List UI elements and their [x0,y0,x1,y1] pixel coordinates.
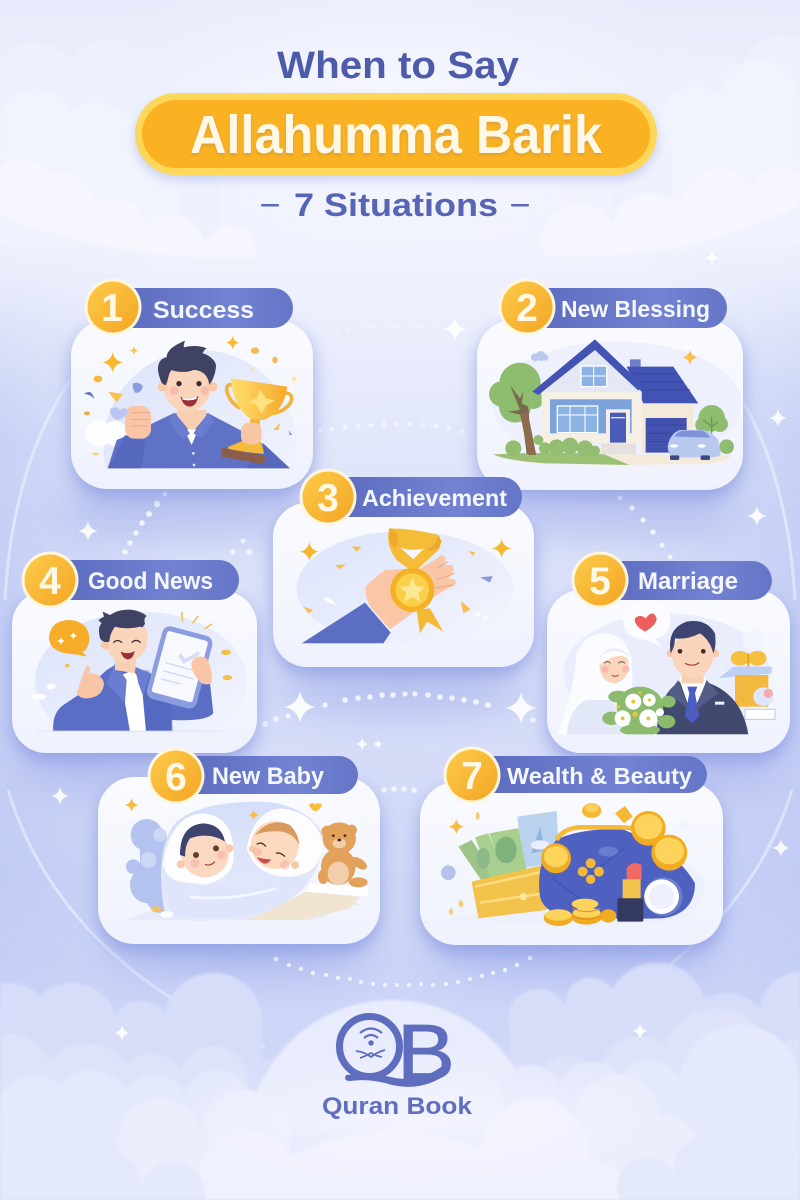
label: New Baby: New Baby [212,763,325,790]
panel: 2 New Blessing [477,278,743,490]
illustration: two swaddled babies and teddy bear [125,798,369,921]
card 1 background [71,320,313,489]
number badge 6: 6 [165,756,187,799]
label: Good News [50,560,239,600]
panel: 4 Good News [12,552,257,753]
panel: 1 Success [71,278,313,543]
label: Wealth & Beauty [472,756,707,793]
background sparkles [51,251,790,1041]
label: Wealth & Beauty: Wealth & Beauty [507,763,692,789]
number badge 7: 7 [461,755,483,798]
label: Achievement: Achievement [362,485,507,511]
title: When to Say: When to Say [277,45,519,87]
illustration: man with phone [30,610,244,732]
number badge 2 [498,278,556,336]
clouds: top [0,35,800,258]
label: Good News: Good News [88,568,213,595]
card 6 background [98,777,380,944]
illustration: wallet, coins, money and lipstick [441,803,705,926]
logo: Quran Book [322,1008,473,1120]
illustration: man holding trophy [84,336,298,468]
illustration: house, trees and car [489,339,742,465]
card 2 background [477,320,743,490]
label: Success [113,288,293,328]
card 7 background [420,782,723,945]
panel: 7 Wealth & Beauty [420,746,723,945]
number badge 1: 1 [101,287,123,330]
bottom cloud glow [180,1050,660,1190]
illustration: hand holding gold medal [297,528,513,646]
illustration: bride and groom with gift [557,613,776,734]
clouds: bottom [0,963,800,1200]
title banner: Allahumma Barik: Allahumma Barik [190,105,603,165]
title banner: Allahumma Barik [135,93,657,175]
number badge 5 [572,552,628,608]
number badge 6 [148,748,204,804]
panel: 5 Marriage [547,552,790,753]
panel: 3 Achievement [273,468,534,667]
number badge 2: 2 [516,287,538,330]
subtitle: 7 Situations: 7 Situations [294,187,498,223]
dotted connector paths [122,325,672,987]
label: Success: Success [153,297,254,324]
label: New Blessing: New Blessing [561,296,710,322]
card 3 background [273,503,534,667]
label: New Blessing [527,288,727,328]
label: New Baby [176,756,358,794]
label: Achievement [328,477,522,517]
logo mark QB: B [397,1008,455,1096]
card 5 background [547,590,790,753]
panel: 6 New Baby [98,748,380,944]
card 4 background [12,591,257,753]
number badge 4: 4 [39,560,61,603]
label: Marriage [600,561,772,600]
number badge 3: 3 [317,477,339,520]
number badge 7 [444,746,500,804]
logo wordmark: Quran Book [322,1093,473,1120]
number badge 1 [84,278,142,336]
number badge 5: 5 [589,560,611,603]
number badge 4 [22,552,78,608]
number badge 3 [300,468,356,526]
label: Marriage: Marriage [638,568,738,595]
logo mark QB [340,1008,455,1096]
